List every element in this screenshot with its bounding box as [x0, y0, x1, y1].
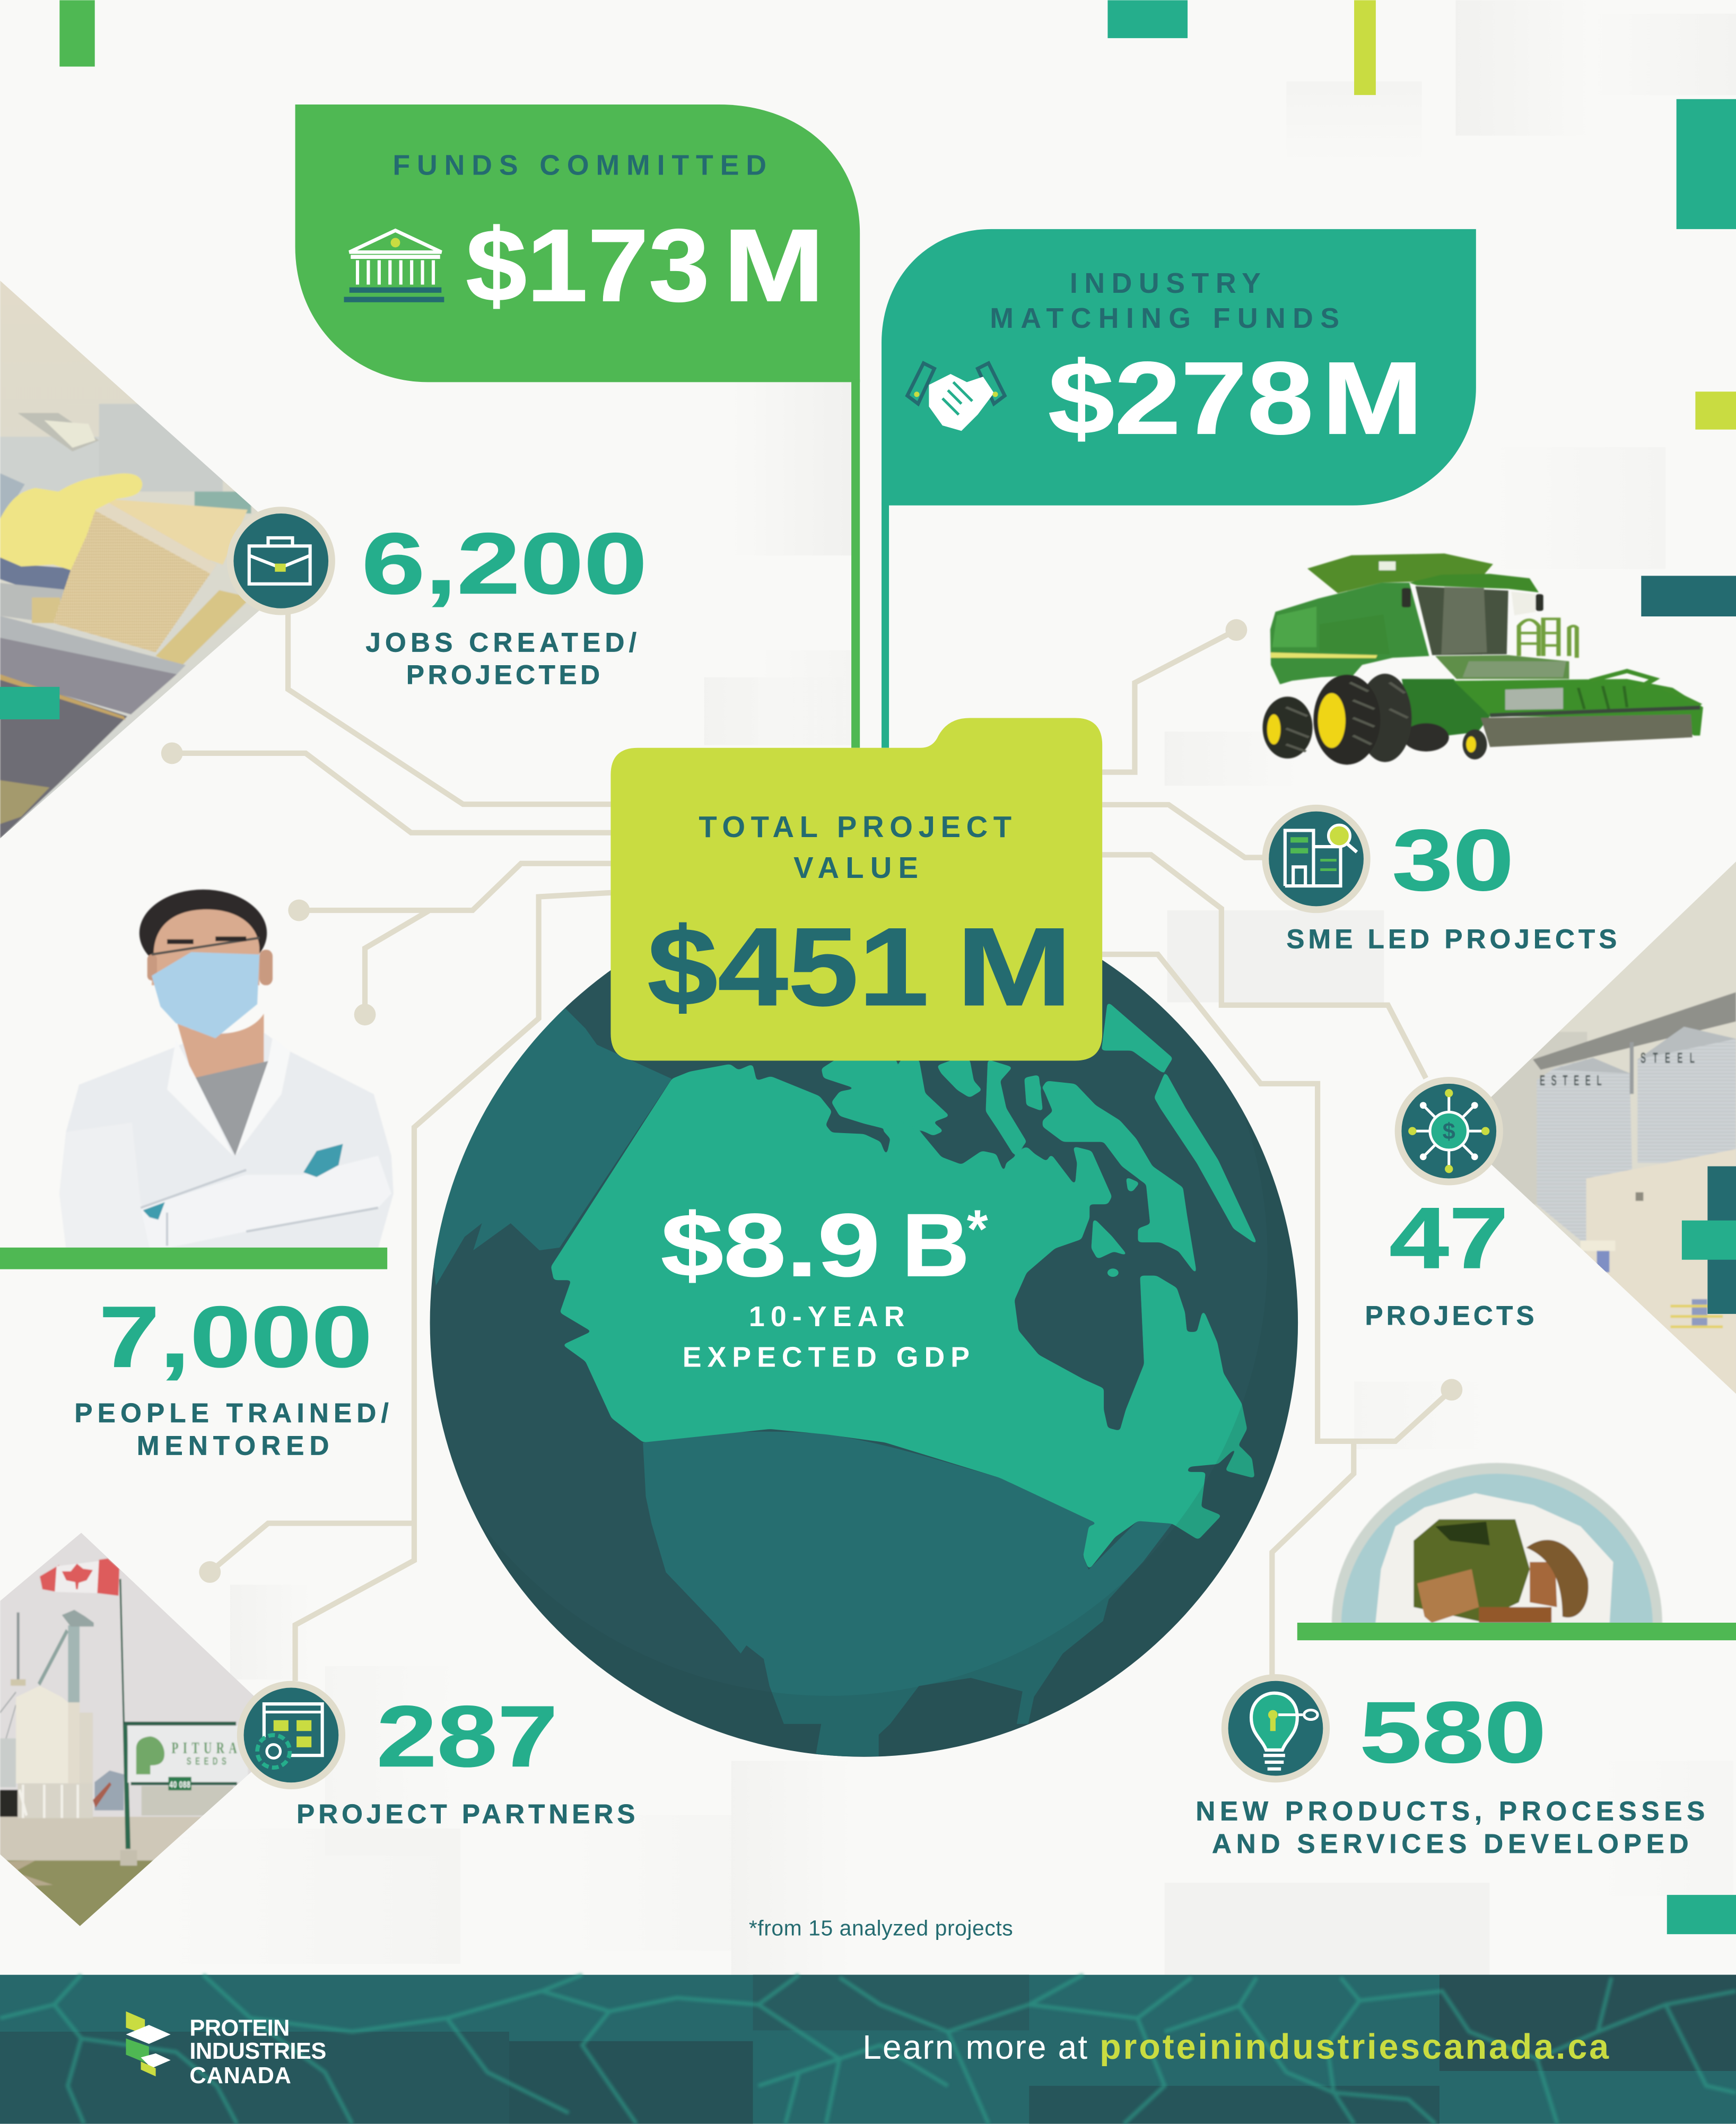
stat: jobs created	[227, 507, 647, 690]
stat: SME led projects: SME LED PROJECTS	[1286, 924, 1617, 954]
stat: new products: AND SERVICES DEVELOPED	[1212, 1829, 1689, 1859]
footer band	[0, 1975, 1736, 2124]
label: total project value: VALUE	[793, 851, 918, 884]
stat: expected GDP	[661, 1195, 988, 1373]
logo mark	[126, 2012, 171, 2076]
stat: new products	[1196, 1674, 1705, 1859]
value: 278 million: M	[1322, 341, 1423, 456]
label: industry matching funds: MATCHING FUNDS	[990, 302, 1339, 334]
value: 451 million: $451	[647, 905, 929, 1029]
value: 173 million: $173	[466, 208, 710, 323]
globe: Canada, Arctic islands and Greenland	[551, 1002, 1258, 1570]
icon: funding network	[1395, 1077, 1503, 1185]
logo wordmark: INDUSTRIES	[189, 2039, 326, 2064]
stat: new products: NEW PRODUCTS, PROCESSES	[1196, 1796, 1705, 1826]
photo: grain silos: STEEL	[1641, 1050, 1695, 1066]
globe: Alaska side	[434, 1008, 671, 1285]
photo: grain silos	[1491, 861, 1736, 1394]
label: total project value	[699, 810, 1011, 884]
stat: projects	[1365, 1077, 1534, 1330]
icon: briefcase	[227, 507, 335, 615]
stat: expected GDP: EXPECTED GDP	[683, 1341, 970, 1373]
people trained photo shelf	[0, 1248, 387, 1269]
stat: project partners	[237, 1681, 635, 1829]
stat: projects: PROJECTS	[1365, 1300, 1534, 1330]
stat: SME led projects: 30	[1392, 812, 1514, 909]
logo wordmark	[189, 2016, 326, 2088]
footer call to action	[862, 2027, 1609, 2067]
footer call to action: Learn more at	[862, 2028, 1087, 2066]
stat: project partners: 287	[377, 1688, 558, 1785]
icon: bank building	[344, 230, 444, 302]
stat: people trained	[74, 1288, 389, 1460]
circuit lines	[161, 611, 1462, 1681]
icon: funding network: $	[1443, 1119, 1455, 1145]
stat: expected GDP: 10-YEAR	[749, 1301, 904, 1333]
photo: grain silos: ESTEEL	[1540, 1072, 1602, 1089]
folder: total project value	[610, 718, 1102, 1060]
stat: expected GDP: *	[967, 1199, 988, 1259]
photo: Pitura Seeds facility: PITURA	[171, 1738, 237, 1757]
decorative blocks over silos	[1682, 1167, 1736, 1314]
value: 173 million: M	[723, 208, 825, 323]
globe: shaded crescent	[390, 818, 1327, 1774]
decorative block over photo	[0, 687, 59, 719]
stat: people trained: 7,000	[99, 1288, 372, 1385]
photo: combine harvester	[1262, 553, 1703, 765]
value: 278 million: $278	[1048, 341, 1313, 456]
value: 451 million: M	[956, 905, 1072, 1029]
stat: jobs created: PROJECTED	[406, 660, 600, 690]
photo: hands holding cup of protein crumble	[0, 281, 259, 838]
label: industry matching funds	[990, 267, 1339, 334]
value: 278 million	[1048, 341, 1423, 456]
stat: people trained: PEOPLE TRAINED/	[74, 1398, 389, 1428]
logo: Protein Industries Canada	[126, 2012, 326, 2088]
icon: building with magnifier	[1262, 805, 1371, 913]
label: total project value: TOTAL PROJECT	[699, 810, 1011, 843]
food shelf bar	[1297, 1623, 1736, 1640]
photo: rice bowl	[1331, 1462, 1663, 1623]
stat: expected GDP: $8.9	[661, 1195, 880, 1295]
stat: projects: 47	[1389, 1189, 1508, 1286]
photo: researcher in lab coat	[59, 890, 394, 1248]
stat: people trained: MENTORED	[137, 1430, 329, 1460]
icon: handshake	[908, 363, 1005, 431]
stat: SME led projects	[1262, 805, 1617, 954]
value: 451 million	[647, 905, 1072, 1029]
value: 173 million	[466, 208, 825, 323]
label: funds committed: FUNDS COMMITTED	[392, 150, 766, 181]
icon: light bulb	[1222, 1674, 1330, 1782]
photo: Pitura Seeds facility	[0, 1533, 254, 1926]
stat: jobs created: JOBS CREATED/	[365, 627, 636, 657]
logo wordmark: CANADA	[189, 2063, 291, 2088]
footnote: *from 15 analyzed projects	[749, 1916, 1013, 1940]
globe	[430, 960, 1298, 1757]
stat: expected GDP: B	[902, 1195, 970, 1295]
logo wordmark: PROTEIN	[189, 2016, 290, 2041]
photo: Pitura Seeds facility: 40 088	[169, 1780, 190, 1790]
photo: Pitura Seeds facility: SEEDS	[187, 1755, 226, 1767]
stat: new products: 580	[1359, 1684, 1547, 1781]
flag: industry matching funds	[882, 229, 1476, 748]
icon: window with gear	[237, 1681, 345, 1789]
globe: United States and Mexico	[643, 1432, 1172, 1756]
stat: jobs created: 6,200	[362, 515, 647, 612]
flag: funds committed	[295, 105, 860, 748]
stat: project partners: PROJECT PARTNERS	[296, 1799, 635, 1829]
footer call to action: proteinindustriescanada.ca	[1100, 2027, 1609, 2067]
label: industry matching funds: INDUSTRY	[1070, 267, 1261, 299]
